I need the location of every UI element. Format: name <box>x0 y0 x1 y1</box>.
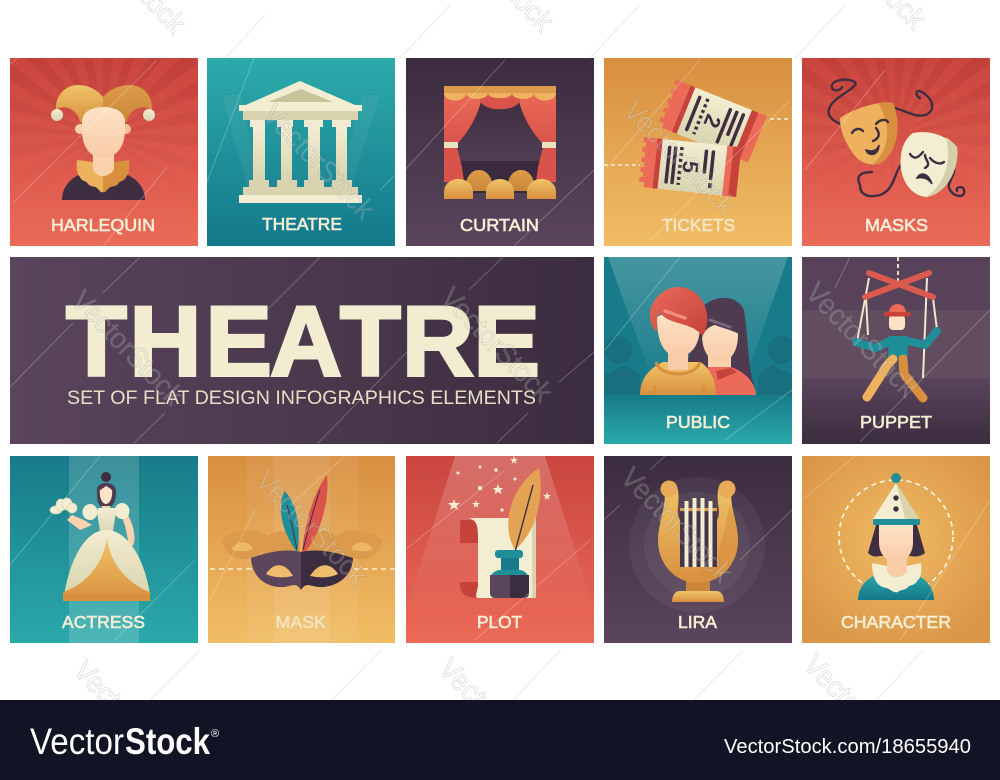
background masks <box>221 530 383 562</box>
label: harlequin: HARLEQUIN <box>51 215 155 235</box>
panel: lira <box>604 456 792 643</box>
label: lira: LIRA <box>678 612 717 632</box>
label: masks: MASKS <box>865 215 928 235</box>
label: puppet: PUPPET <box>860 412 932 432</box>
title: E <box>206 286 272 398</box>
icon: stage curtain <box>444 86 556 199</box>
icon: temple <box>239 81 362 203</box>
panel: title <box>10 257 594 444</box>
watermark overlay: VectorStock <box>614 462 739 589</box>
watermark overlay: VectorStock <box>797 649 922 776</box>
title: E <box>474 286 540 398</box>
stars <box>448 456 551 512</box>
footer image id: VectorStock.com/18655940 <box>724 736 971 758</box>
watermark overlay: VectorStock <box>434 282 559 409</box>
footer bar <box>0 700 1000 780</box>
label: plot: PLOT <box>477 612 522 632</box>
watermark overlay: VectorStock <box>799 277 924 404</box>
label: curtain: CURTAIN <box>460 215 539 235</box>
footer logo: Vector <box>30 721 124 762</box>
icon: scroll <box>460 518 536 598</box>
label: tickets: TICKETS <box>662 215 735 235</box>
watermark overlay: VectorStock <box>249 465 374 592</box>
icon: ticket 1: 5 <box>677 160 704 174</box>
footer logo: Stock <box>125 721 210 762</box>
footer logo <box>30 721 219 762</box>
watermark overlay: VectorStock <box>256 99 381 226</box>
panel: masks <box>802 58 990 246</box>
panel: mask <box>208 456 395 643</box>
icon: man <box>640 287 716 395</box>
title: T <box>66 286 127 398</box>
title: R <box>402 286 474 398</box>
icon: marionette <box>856 273 937 398</box>
icon: quill <box>508 468 541 552</box>
label: mask: MASK <box>276 612 326 632</box>
title: H <box>130 286 201 398</box>
panel: tickets <box>604 58 792 246</box>
icon: feathers <box>281 475 328 552</box>
audience silhouettes <box>604 336 796 395</box>
label: theatre: THEATRE <box>262 214 342 234</box>
title: A <box>270 286 342 398</box>
icon: sad mask <box>900 132 957 197</box>
label: actress: ACTRESS <box>62 612 145 632</box>
footer logo: ® <box>211 728 219 740</box>
watermark overlay: VectorStock <box>617 95 742 222</box>
icon: happy mask <box>840 102 898 165</box>
icon: jester <box>51 85 155 200</box>
icon: ticket 2 <box>657 79 767 163</box>
title: T <box>340 286 401 398</box>
panel: character <box>802 456 990 643</box>
icon: actress figure <box>50 472 150 601</box>
panel: public <box>604 257 796 444</box>
panel: curtain <box>406 58 594 246</box>
subtitle: SET OF FLAT DESIGN INFOGRAPHICS ELEMENTS <box>67 387 536 409</box>
icon: ticket 1 <box>639 137 741 197</box>
icon: ink bottle <box>490 550 529 598</box>
panel: puppet <box>802 257 990 444</box>
watermark overlay: VectorStock <box>65 285 190 412</box>
panel: actress <box>10 456 198 643</box>
icon: clown <box>858 473 934 600</box>
icon: woman <box>688 298 756 395</box>
panel: theatre <box>207 58 395 246</box>
icon: carnival mask <box>251 551 353 590</box>
icon: strings <box>829 80 964 196</box>
icon: lyre <box>658 480 738 602</box>
panel: harlequin <box>10 58 198 246</box>
panel: plot <box>406 456 594 643</box>
icon: ticket 2: 2 <box>699 111 726 132</box>
label: public: PUBLIC <box>666 412 730 432</box>
label: character: CHARACTER <box>841 612 951 632</box>
